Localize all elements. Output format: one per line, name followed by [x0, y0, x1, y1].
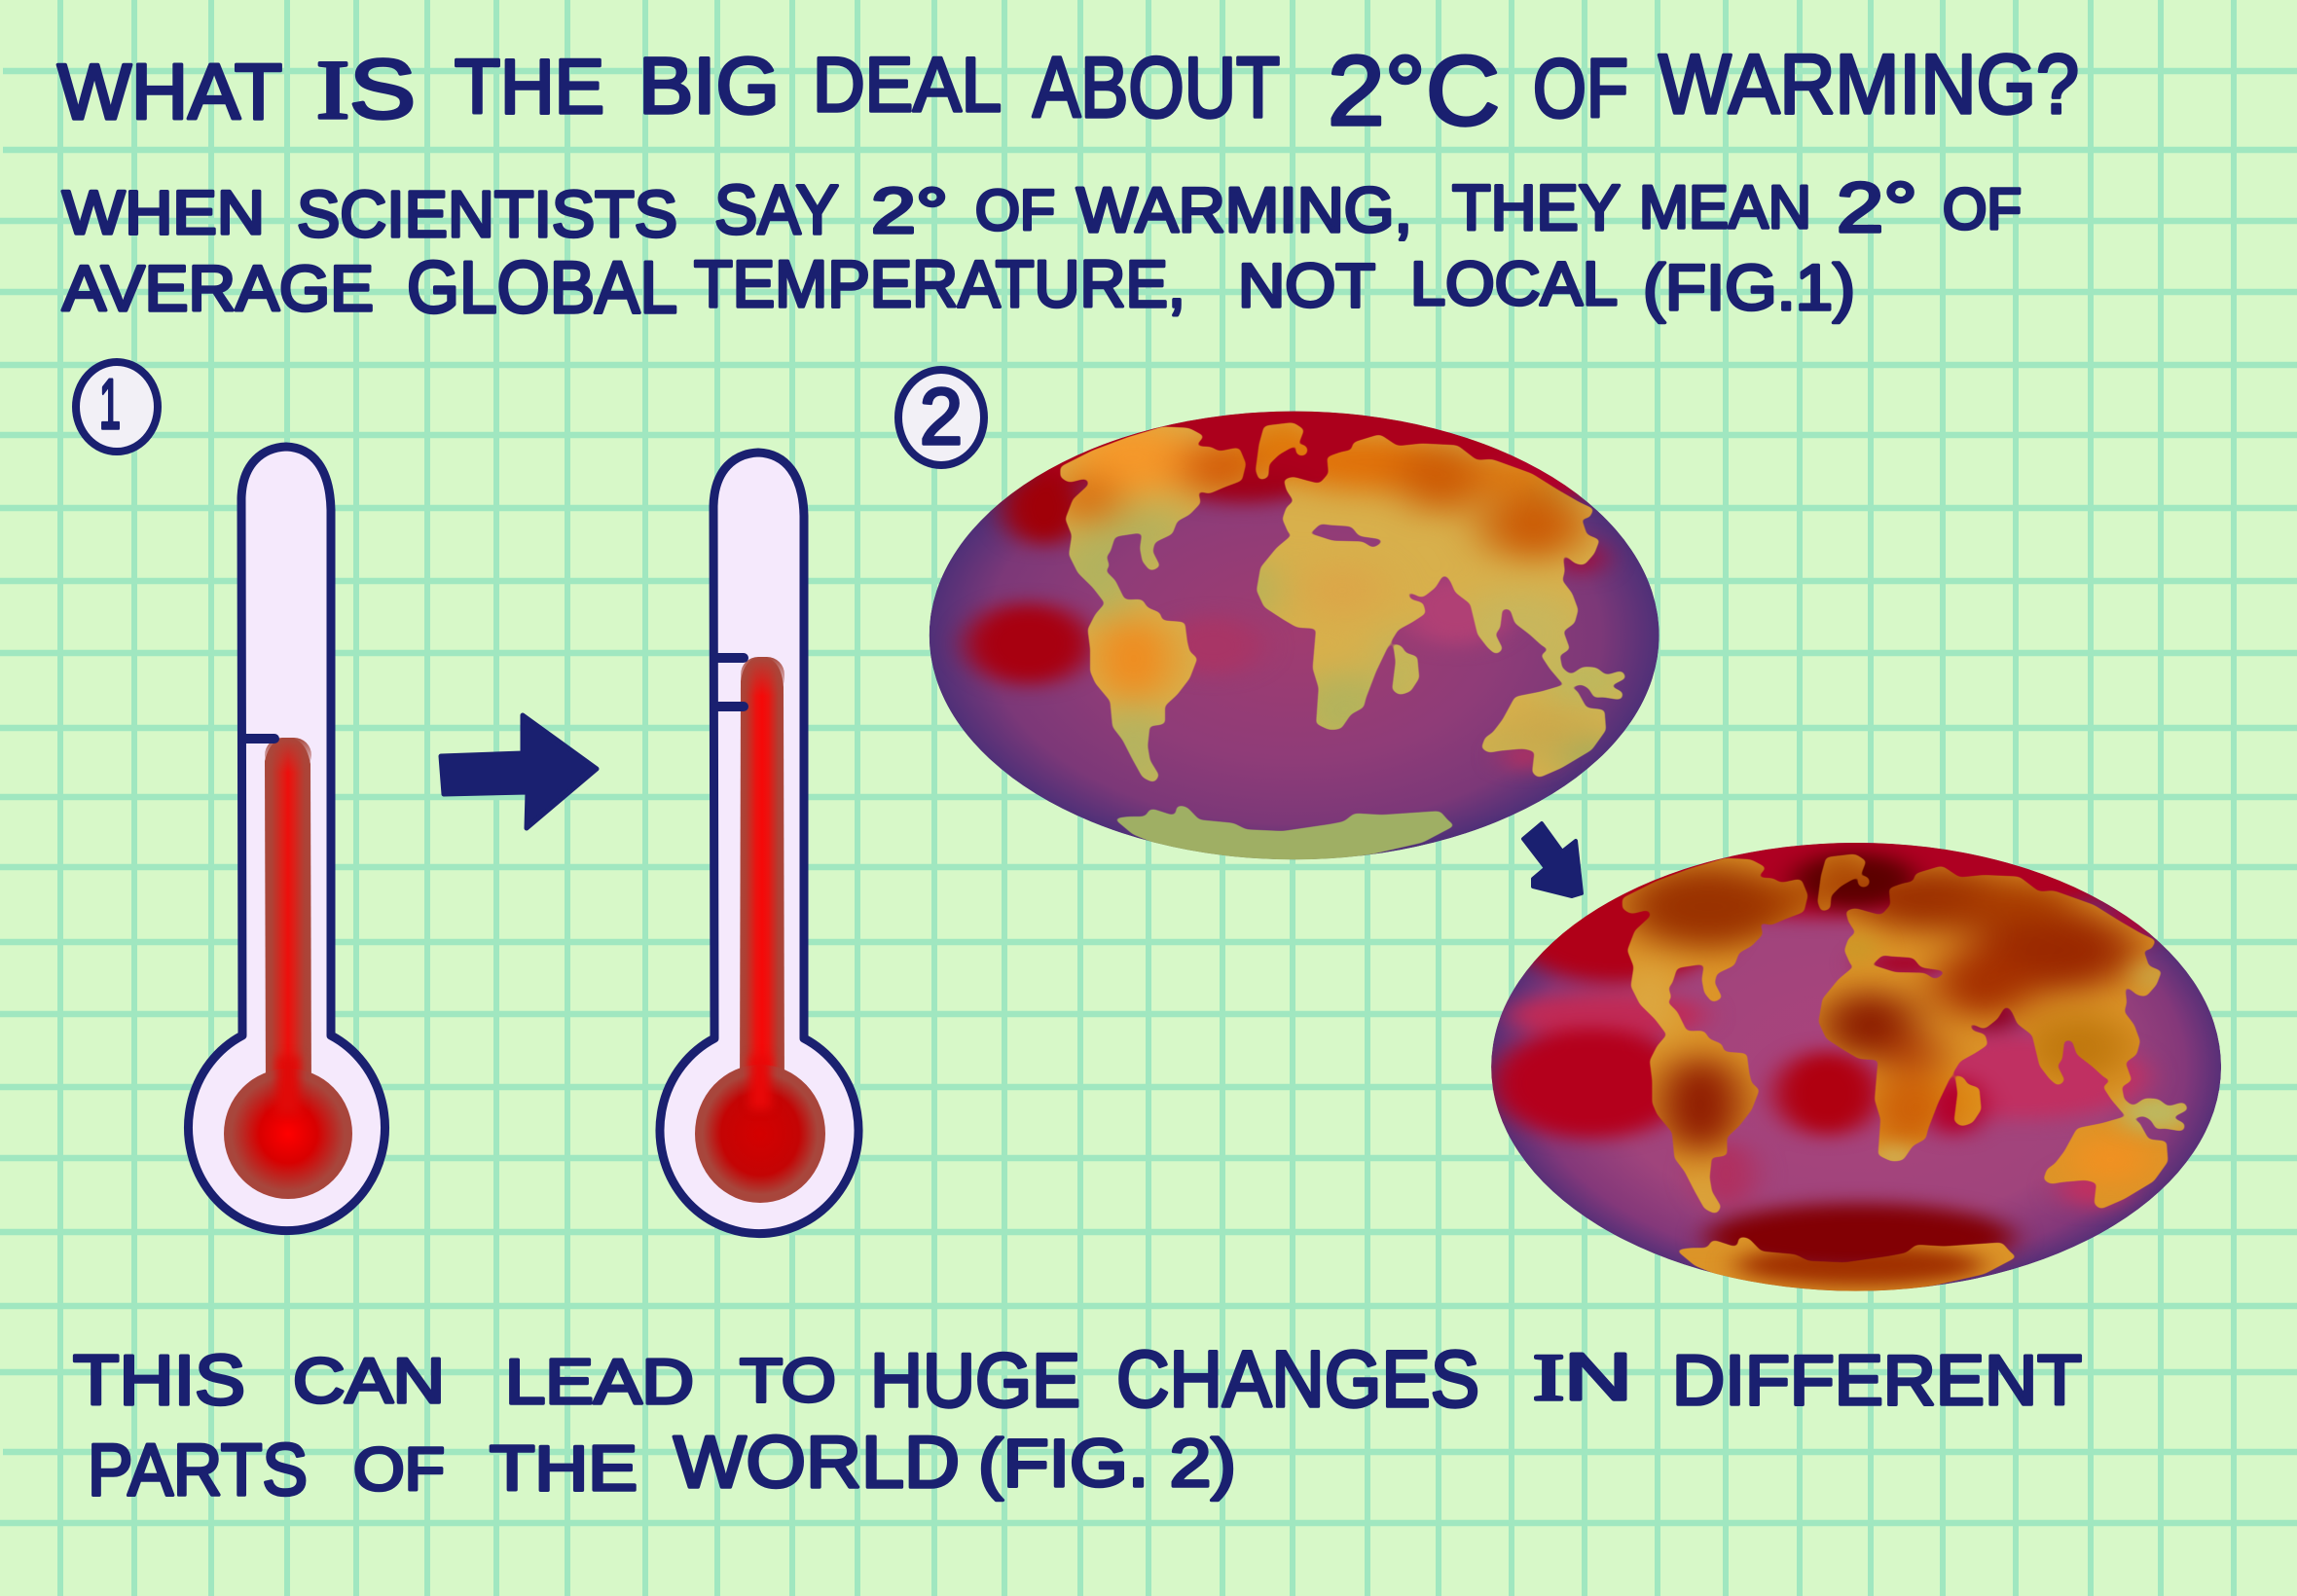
- closing text line 1: TO: [740, 1347, 836, 1415]
- closing text line 2: WORLD: [674, 1421, 960, 1503]
- title: WHAT: [57, 49, 282, 136]
- intro text line 1: OF: [975, 179, 1055, 242]
- intro text line 1: THEY: [1452, 171, 1621, 243]
- title: IS: [316, 43, 416, 136]
- intro text line 2: (FIG.1): [1643, 251, 1855, 323]
- closing text line 1: HUGE: [870, 1337, 1080, 1423]
- title: DEAL: [813, 41, 1002, 127]
- intro text line 2: NOT: [1238, 252, 1375, 320]
- closing text line 1: THIS: [73, 1342, 245, 1420]
- title: THE: [455, 43, 604, 129]
- title: 2°C: [1328, 37, 1500, 146]
- title: [57, 37, 2079, 146]
- intro text line 2: TEMPERATURE,: [694, 247, 1185, 321]
- thermometer: before warming: [189, 447, 385, 1231]
- continents: [1060, 422, 1625, 860]
- closing text line 2: (FIG. 2): [978, 1426, 1236, 1501]
- arrow: current map to warmer map: [1523, 823, 1582, 896]
- title: WARMING?: [1659, 38, 2079, 131]
- closing text line 1: CAN: [293, 1345, 445, 1416]
- badge: figure 2: [898, 370, 984, 465]
- closing text line 1: IN: [1533, 1340, 1632, 1414]
- intro text line 1: WARMING,: [1076, 174, 1412, 245]
- closing text line 1: DIFFERENT: [1672, 1342, 2082, 1420]
- closing text line 2: THE: [490, 1433, 638, 1504]
- closing text line 1: CHANGES: [1116, 1335, 1479, 1424]
- ocean heat: [930, 380, 1659, 859]
- ocean heat: [1491, 808, 2221, 1291]
- intro text line 1: [62, 169, 2022, 251]
- intro text line 1: OF: [1943, 177, 2022, 241]
- intro text line 1: SAY: [714, 172, 839, 249]
- closing text line 2: [88, 1421, 1236, 1510]
- continents: [1622, 854, 2188, 1291]
- intro text line 2: LOCAL: [1410, 250, 1618, 318]
- closing text line 2: OF: [353, 1436, 445, 1504]
- title: BIG: [638, 42, 780, 130]
- title: ABOUT: [1033, 39, 1280, 135]
- closing text line 1: [73, 1335, 2082, 1424]
- intro text line 1: 2°: [1837, 169, 1917, 247]
- intro text line 2: [62, 246, 1855, 328]
- badge: figure 1: [76, 362, 158, 452]
- thermometer: after warming: [660, 453, 858, 1234]
- arrow: thermometer before to after: [441, 715, 597, 828]
- intro text line 1: SCIENTISTS: [297, 178, 677, 251]
- intro text line 1: MEAN: [1639, 174, 1811, 241]
- badge: figure 2: 2: [920, 373, 963, 461]
- map: warmer world: [1491, 808, 2221, 1301]
- intro text line 2: GLOBAL: [407, 246, 677, 328]
- closing text line 1: LEAD: [505, 1346, 694, 1417]
- intro text line 2: AVERAGE: [62, 252, 374, 324]
- intro text line 1: WHEN: [62, 179, 265, 247]
- badge: figure 1: 1: [99, 366, 121, 444]
- intro text line 1: 2°: [871, 174, 948, 246]
- title: OF: [1533, 43, 1628, 135]
- map: current warming: [930, 380, 1659, 873]
- closing text line 2: PARTS: [88, 1429, 308, 1510]
